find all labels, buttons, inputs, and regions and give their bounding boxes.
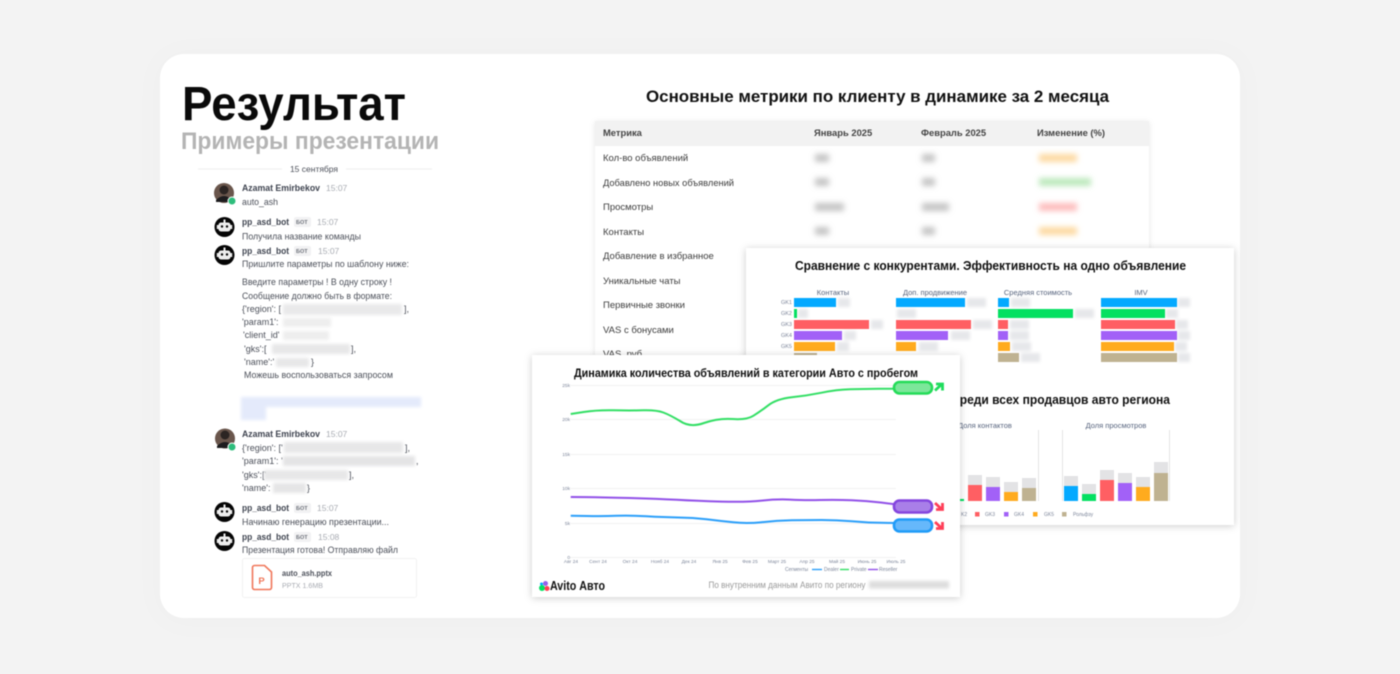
row labels: GK3 bbox=[781, 322, 792, 328]
chart legend: Private bbox=[851, 567, 867, 573]
sub-heading: sellers: среди всех продавцов авто региона bbox=[953, 392, 1171, 407]
message: bot template: ], bbox=[351, 344, 356, 354]
line: private bbox=[571, 389, 895, 425]
message: bot team name: 15:07 bbox=[317, 217, 339, 227]
table header bbox=[595, 121, 1149, 146]
message: user parameters: 'name': bbox=[242, 483, 270, 493]
message: user parameters: Azamat Emirbekov bbox=[242, 429, 321, 440]
message: user parameters: } bbox=[307, 483, 310, 493]
message: bot template bbox=[242, 246, 409, 380]
message: user parameters: 15:07 bbox=[326, 429, 348, 439]
avatar: user bbox=[215, 428, 236, 452]
x axis labels: Май 25 bbox=[829, 558, 845, 565]
y axis labels and grid: 0 bbox=[567, 555, 570, 561]
message: bot template: {'region': [ bbox=[242, 304, 281, 314]
message: user parameters: , bbox=[416, 456, 419, 466]
x axis labels: Дек 24 bbox=[682, 559, 697, 565]
message: bot generating: Начинаю генерацию презентации... bbox=[242, 517, 389, 527]
message: bot template: } bbox=[311, 357, 314, 367]
message: bot template: БОТ bbox=[296, 249, 308, 255]
panel heading: Сравнение с конкурентами. Эффективность на одно объявление bbox=[795, 258, 1186, 273]
message: bot generating: БОТ bbox=[296, 506, 308, 512]
callout: dealer value bbox=[894, 520, 932, 532]
avatar: bot bbox=[214, 502, 234, 522]
callout: private value bbox=[894, 382, 932, 394]
message: bot template: Сообщение должно быть в формате: bbox=[242, 291, 392, 301]
row labels bbox=[603, 153, 734, 360]
chart legend: GK5 bbox=[1044, 512, 1054, 518]
x axis labels: Нояб 24 bbox=[651, 559, 669, 565]
x axis labels: Июнь 25 bbox=[858, 559, 877, 565]
bar chart: shares bbox=[958, 430, 1170, 501]
message: user parameters: 'param1': ' bbox=[242, 456, 283, 466]
message: user auto_ash: 15:07 bbox=[326, 183, 348, 193]
x axis labels: Авг 24 bbox=[564, 559, 578, 565]
y axis labels and grid bbox=[562, 383, 896, 561]
y axis labels and grid: 20k bbox=[562, 417, 571, 423]
message: bot generating bbox=[242, 503, 389, 527]
chart legend: GK4 bbox=[1014, 512, 1024, 518]
row labels: GK5 bbox=[781, 344, 792, 350]
message: bot generating: 15:07 bbox=[317, 503, 339, 513]
subtitle: Примеры презентации bbox=[181, 128, 439, 155]
row labels: GK4 bbox=[781, 333, 792, 339]
x axis labels: Апр 25 bbox=[799, 559, 815, 565]
column titles: Средняя стоимость bbox=[1004, 288, 1072, 297]
file attachment: auto_ash.pptx bbox=[282, 568, 332, 578]
column titles: Контакты bbox=[817, 288, 849, 297]
row labels: Первичные звонки bbox=[603, 300, 685, 311]
message: bot ready: 15:08 bbox=[318, 532, 340, 542]
row labels: Уникальные чаты bbox=[603, 276, 681, 287]
icon: pptx file: P bbox=[258, 576, 265, 587]
icon: arrow down bbox=[935, 503, 942, 510]
row labels: VAS с бонусами bbox=[603, 325, 674, 336]
message: user auto_ash bbox=[242, 183, 348, 207]
table header: Метрика bbox=[603, 127, 643, 138]
chart legend: Сегменты bbox=[785, 567, 808, 573]
x axis labels: Март 25 bbox=[768, 559, 786, 565]
row labels: Просмотры bbox=[603, 202, 653, 213]
line: reseller bbox=[571, 497, 895, 504]
icon: pptx file bbox=[252, 566, 272, 590]
message: user auto_ash: auto_ash bbox=[242, 197, 278, 207]
message: bot template: Можешь воспользоваться запросом bbox=[244, 370, 393, 380]
avatar: bot bbox=[214, 531, 234, 551]
chart legend: K2 bbox=[961, 512, 967, 518]
y axis labels and grid: 25k bbox=[562, 383, 571, 389]
x axis labels: Окт 24 bbox=[623, 559, 638, 565]
message: bot template: 15:07 bbox=[318, 246, 340, 256]
chart legend bbox=[785, 567, 898, 573]
column titles: IMV bbox=[1134, 288, 1148, 297]
chart legend: Dealer bbox=[824, 567, 839, 573]
chart legend: Рольфзу bbox=[1073, 512, 1094, 518]
message: user parameters: ], bbox=[349, 470, 354, 480]
message: bot ready: pp_asd_bot bbox=[242, 532, 290, 543]
x axis labels: Июль 25 bbox=[887, 559, 906, 565]
x axis labels: Фев 25 bbox=[742, 559, 758, 565]
file attachment: PPTX 1.6MB bbox=[282, 581, 323, 590]
icon: arrow down bbox=[935, 522, 942, 528]
chart titles: Доля контактов bbox=[958, 421, 1012, 430]
y axis labels and grid: 10k bbox=[562, 486, 571, 492]
message: bot template: ], bbox=[404, 304, 409, 314]
message: user auto_ash: Azamat Emirbekov bbox=[242, 183, 321, 194]
panel heading: Динамика количества объявлений в категории Авто с пробегом bbox=[574, 366, 918, 380]
table header: Изменение (%) bbox=[1037, 127, 1105, 138]
message: bot team name: БОТ bbox=[296, 220, 308, 226]
chart titles: Доля просмотров bbox=[1086, 421, 1146, 430]
table header: Февраль 2025 bbox=[921, 127, 986, 138]
avatar: bot bbox=[214, 217, 234, 237]
message: user parameters: {'region': [' bbox=[242, 443, 283, 453]
chart legend bbox=[961, 512, 1094, 518]
row labels: GK2 bbox=[781, 311, 792, 317]
chart legend: Reseller bbox=[879, 567, 898, 573]
blurred link bbox=[241, 397, 421, 420]
message: bot template: 'param1': bbox=[242, 317, 278, 327]
chart legend: GK3 bbox=[985, 512, 995, 518]
callout: reseller value bbox=[894, 500, 932, 512]
avatar: user bbox=[214, 183, 236, 206]
table header: Январь 2025 bbox=[814, 127, 872, 138]
avatar: bot bbox=[214, 245, 234, 265]
row labels: Контакты bbox=[603, 227, 644, 238]
x axis labels bbox=[564, 558, 906, 565]
title: Результат bbox=[182, 78, 406, 131]
message: bot template: 'name':' bbox=[244, 357, 274, 367]
message: user parameters bbox=[242, 429, 419, 493]
message: user parameters: 'gks':[' bbox=[242, 470, 266, 480]
line: dealer bbox=[571, 516, 895, 523]
column titles: Доп. продвижение bbox=[903, 288, 967, 297]
date separator: 15 сентября bbox=[290, 164, 338, 174]
message: bot template: 'client_id' bbox=[243, 330, 280, 340]
file attachment bbox=[242, 558, 416, 598]
row labels: Добавлено новых объявлений bbox=[603, 178, 734, 189]
message: bot generating: pp_asd_bot bbox=[242, 503, 290, 514]
column titles bbox=[817, 288, 1148, 297]
message: bot template: pp_asd_bot bbox=[242, 246, 290, 257]
message: bot ready: Презентация готова! Отправляю файл bbox=[242, 545, 398, 555]
main white card bbox=[160, 54, 1240, 618]
message: bot template: 'gks':[ bbox=[244, 344, 267, 354]
x axis labels: Янв 25 bbox=[712, 559, 728, 565]
icon: arrow up bbox=[935, 384, 942, 390]
panel: metrics table bbox=[595, 121, 1149, 361]
y axis labels and grid: 15k bbox=[562, 452, 571, 458]
message: user parameters: ], bbox=[405, 443, 410, 453]
x axis labels: Сент 24 bbox=[589, 559, 607, 565]
panel: competitors bbox=[746, 248, 1234, 525]
message: bot team name bbox=[242, 217, 361, 242]
message: bot template: Введите параметры ! В одну строку ! bbox=[242, 277, 392, 287]
blurred values bbox=[815, 154, 1091, 235]
bar chart: horizontal bars bbox=[794, 298, 1190, 362]
source note: По внутренним данным Авито по региону bbox=[708, 580, 866, 590]
message: bot ready bbox=[242, 532, 398, 555]
chat screenshot bbox=[198, 164, 432, 598]
row labels: GK1 bbox=[781, 300, 792, 306]
panel: listings dynamics bbox=[532, 355, 960, 597]
chart titles bbox=[958, 421, 1146, 430]
message: bot team name: Получила название команды bbox=[242, 232, 361, 242]
y axis labels and grid: 5k bbox=[565, 521, 571, 527]
row labels: Добавление в избранное bbox=[603, 251, 714, 262]
row labels bbox=[781, 300, 792, 350]
message: bot template: Пришлите параметры по шаблону ниже: bbox=[242, 259, 409, 269]
row labels: Кол-во объявлений bbox=[603, 153, 688, 164]
message: bot team name: pp_asd_bot bbox=[242, 217, 290, 228]
row labels: VAS, руб bbox=[603, 349, 643, 360]
slide title: main metrics: Основные метрики по клиенту в динамике за 2 месяца bbox=[646, 87, 1110, 106]
logo: Avito Avto: Avito Авто bbox=[550, 578, 605, 593]
message: bot ready: БОТ bbox=[296, 535, 308, 541]
